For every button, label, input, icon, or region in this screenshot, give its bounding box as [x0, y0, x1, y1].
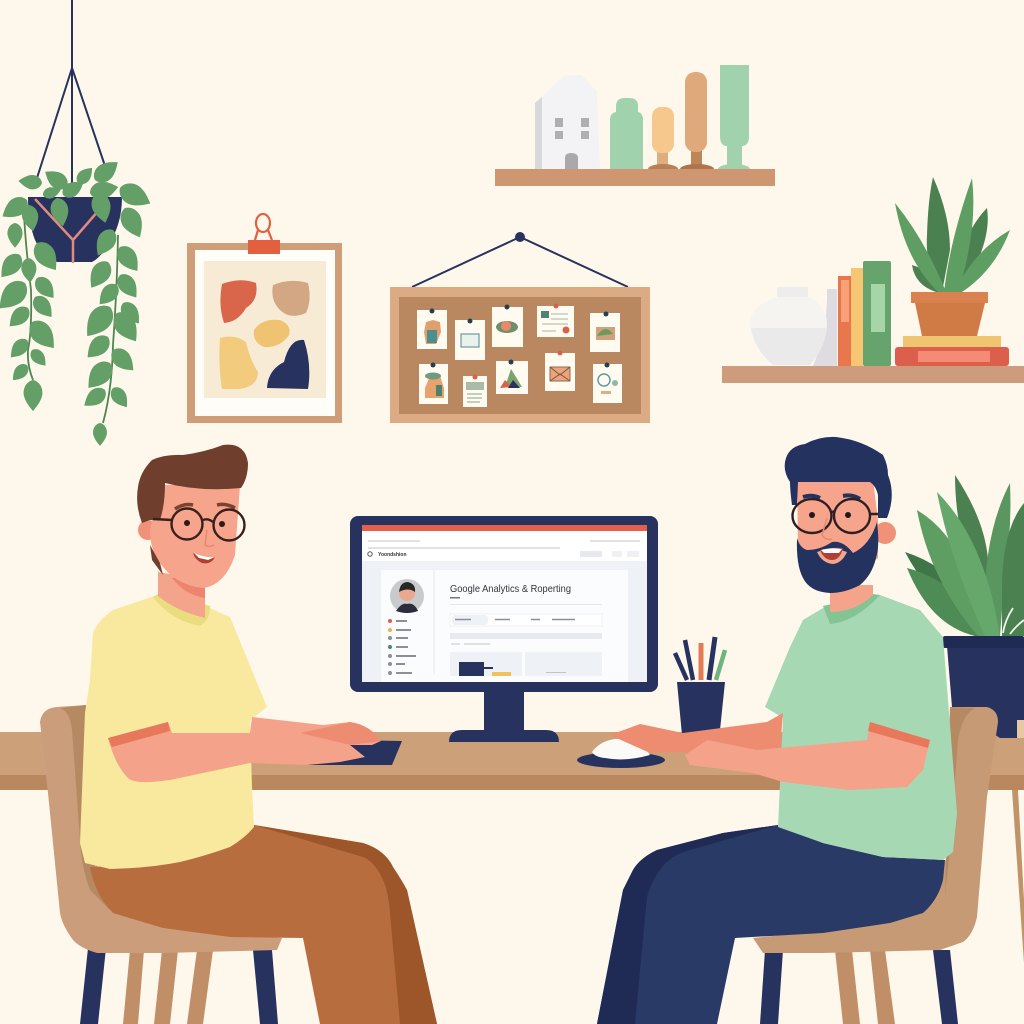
frame	[187, 243, 342, 423]
chair shell	[40, 705, 282, 953]
plant pot	[943, 636, 1024, 738]
hair	[137, 445, 248, 523]
note cards	[417, 306, 622, 407]
yellow shirt	[80, 595, 267, 869]
side menu	[388, 619, 416, 675]
left chair legs	[80, 948, 278, 1024]
neck	[830, 585, 873, 612]
eyebrows	[803, 495, 860, 499]
potted plant	[895, 177, 1010, 366]
head	[137, 445, 248, 588]
stand	[449, 690, 559, 742]
shelf board	[722, 366, 1024, 383]
right chair legs	[760, 950, 958, 1024]
white house	[535, 75, 600, 170]
mouth	[817, 549, 847, 564]
right shelf with decor	[722, 177, 1024, 383]
vases	[610, 65, 750, 174]
mouth	[193, 553, 215, 563]
abstract art frame	[187, 214, 342, 423]
nose	[822, 518, 832, 540]
right person	[597, 437, 957, 1024]
monitor	[350, 516, 658, 742]
left person	[80, 445, 437, 1024]
bowl	[750, 287, 837, 366]
collar	[823, 594, 880, 624]
pins	[430, 304, 610, 380]
filter row	[450, 614, 602, 644]
arm	[108, 717, 381, 782]
collar	[153, 594, 210, 626]
hair	[785, 437, 892, 518]
binder clip	[248, 214, 280, 254]
beard	[797, 522, 878, 593]
art shapes	[219, 280, 310, 389]
avatar	[390, 579, 424, 613]
books	[838, 261, 891, 366]
keyboard	[305, 740, 402, 765]
report heading: Google Analytics & Roperting	[450, 583, 571, 595]
head	[785, 437, 896, 593]
nose	[205, 530, 214, 546]
trousers	[90, 825, 437, 1024]
screen	[362, 525, 647, 682]
desk	[0, 732, 1024, 963]
screen: Yoondshion	[378, 552, 407, 558]
top shelf with decor	[495, 65, 775, 186]
pencil cup	[675, 637, 725, 735]
right chair	[753, 707, 998, 1024]
mouse and mouse pad	[577, 739, 665, 768]
green shirt	[765, 595, 957, 860]
shelf board	[495, 169, 775, 186]
left chair	[40, 705, 282, 1024]
report cards	[450, 652, 602, 676]
glasses	[792, 499, 878, 533]
arm	[610, 713, 930, 790]
chair shell	[753, 707, 998, 953]
trousers	[597, 825, 945, 1024]
eyebrows	[175, 504, 235, 509]
corkboard	[390, 232, 650, 423]
glasses	[153, 508, 244, 540]
hanging plant	[0, 0, 155, 446]
neck	[158, 572, 205, 618]
note drawings	[424, 311, 618, 402]
large potted plant	[905, 475, 1024, 636]
